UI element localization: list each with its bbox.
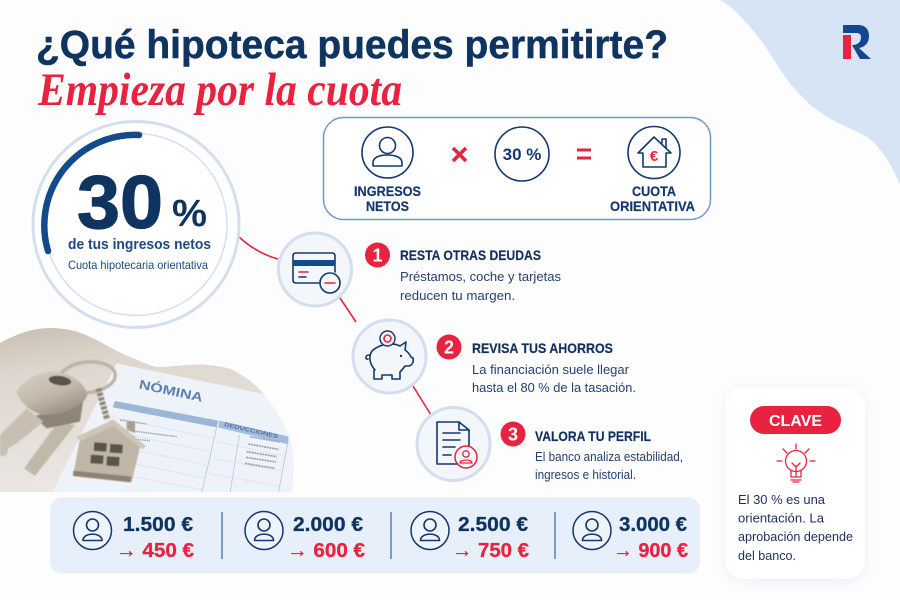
step 1 heading: RESTA OTRAS DEUDAS <box>400 247 541 263</box>
step 2 text line 1: La financiación suele llegar <box>472 362 630 377</box>
example 2.500 €: 2.500 € <box>458 514 528 536</box>
step 2 text line 2: hasta el 80 % de la tasación. <box>472 380 636 395</box>
number badge 2: 2 <box>444 338 454 358</box>
30 % circle <box>495 127 549 181</box>
multiply sign <box>453 148 466 161</box>
clave text line 2: orientación. La <box>738 510 825 526</box>
label: orientativa: ORIENTATIVA <box>610 199 695 214</box>
photo: keys on payslip <box>0 328 294 492</box>
label: cuota: CUOTA <box>632 184 676 199</box>
payslip paper <box>52 364 294 492</box>
metal keys <box>0 359 117 476</box>
step 3: valora tu perfil <box>417 408 683 482</box>
panel: 30 % gauge <box>33 122 239 328</box>
label: netos: NETOS <box>366 199 409 214</box>
step 1: resta otras deudas <box>278 233 561 306</box>
icon: credit card <box>278 233 352 306</box>
gauge note: Cuota hipotecaria orientativa <box>68 258 208 272</box>
number badge 2 <box>436 334 462 360</box>
number badge 1 <box>365 242 390 268</box>
30 % circle: 30 % <box>503 145 541 164</box>
subtitle: Empieza por la cuota <box>37 64 402 116</box>
panel: formula <box>324 118 710 220</box>
number badge 3 <box>500 422 526 446</box>
example 3.000 €: → 900 € <box>613 540 688 562</box>
number badge 1: 1 <box>372 246 383 266</box>
clave pill <box>750 406 841 434</box>
step 3 heading: VALORA TU PERFIL <box>535 428 651 444</box>
number badge 3: 3 <box>508 424 518 444</box>
gauge caption: de tus ingresos netos <box>68 236 211 253</box>
example 2.500 € <box>411 512 529 562</box>
icon: house with euro <box>628 126 680 178</box>
icon: house with euro: € <box>650 148 659 165</box>
example 3.000 €: 3.000 € <box>619 514 687 536</box>
title: ¿Qué hipoteca puedes permitirte? <box>36 23 668 67</box>
clave text line 1: El 30 % es una <box>738 492 826 507</box>
connector lines <box>239 237 431 415</box>
example 1.500 € <box>74 512 194 562</box>
example 2.000 €: → 600 € <box>287 540 365 562</box>
progress arc <box>44 135 139 251</box>
example 3.000 € <box>573 512 688 562</box>
example 2.000 €: 2.000 € <box>293 514 363 536</box>
label: ingresos: INGRESOS <box>354 184 421 199</box>
percent sign: % <box>172 193 207 235</box>
example 2.500 €: → 750 € <box>452 540 529 562</box>
example 1.500 €: 1.500 € <box>123 514 193 536</box>
clave text line 4: del banco. <box>738 548 796 563</box>
icon: light bulb <box>777 444 815 482</box>
step 1 text line 2: reducen tu margen. <box>400 288 515 303</box>
house keychain <box>73 419 146 482</box>
step 3 text line 1: El banco analiza estabilidad, <box>535 450 683 464</box>
step 2: revisa tus ahorros <box>353 320 636 395</box>
icon: piggy bank <box>353 320 426 393</box>
step 2 heading: REVISA TUS AHORROS <box>472 340 613 356</box>
step 1 text line 1: Préstamos, coche y tarjetas <box>400 269 561 284</box>
equals sign <box>577 150 591 158</box>
payslip paper: NÓMINA <box>138 377 204 405</box>
panel: clave callout <box>725 387 865 579</box>
logo <box>843 25 871 59</box>
step 3 text line 2: ingresos e historial. <box>535 468 636 482</box>
big number: 30 <box>77 160 163 244</box>
payslip paper: DEDUCCIONES <box>224 422 278 440</box>
icon: document with profile <box>417 408 490 480</box>
background blob: top right <box>720 0 900 185</box>
clave pill: CLAVE <box>769 413 822 430</box>
panel: examples by income <box>50 498 700 574</box>
icon: income person <box>362 127 413 178</box>
example 1.500 €: → 450 € <box>116 540 194 562</box>
clave text line 3: aprobación depende <box>738 529 853 544</box>
example 2.000 € <box>245 512 365 562</box>
